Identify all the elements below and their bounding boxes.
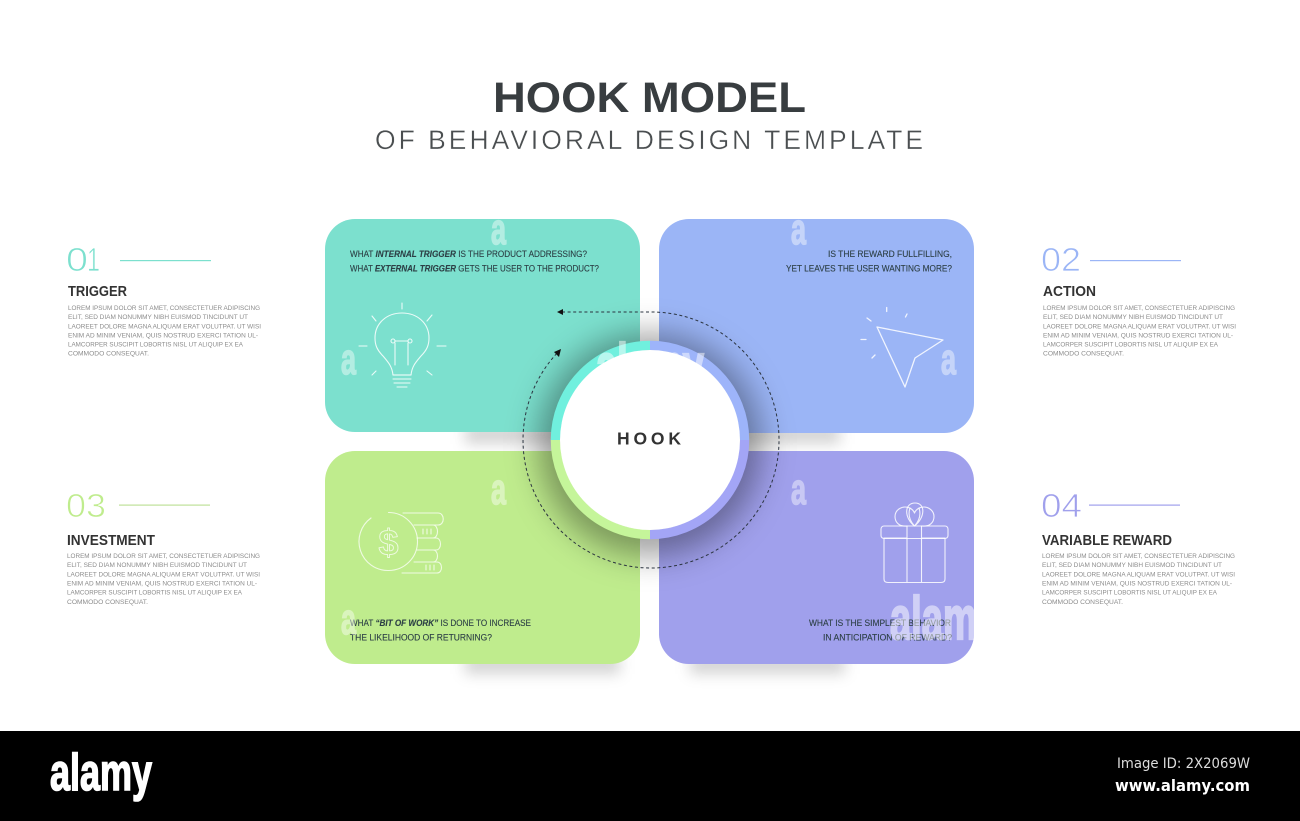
block: 02 action: LAOREET DOLORE MAGNA ALIQUAM ERAT VOLUTPAT. UT WISI — [1043, 324, 1236, 330]
hub shadow — [538, 333, 762, 557]
watermarks: a — [491, 465, 506, 514]
watermarks: a — [341, 595, 356, 644]
block: 01 trigger: ELIT, SED DIAM NONUMMY NIBH EUISMOD TINCIDUNT UT — [68, 314, 248, 321]
block: 03 investment: LOREM IPSUM DOLOR SIT AMET, CONSECTETUER ADIPISCING — [67, 553, 260, 560]
icon: gift — [881, 503, 948, 582]
block: 04 variable reward: ENIM AD MINIM VENIAM, QUIS NOSTRUD EXERCI TATION UL- — [1042, 580, 1232, 588]
block: 02 action: ACTION — [1043, 283, 1096, 300]
block: 03 investment: LAMCORPER SUSCIPIT LOBORTIS NISL UT ALIQUIP EX EA — [67, 590, 243, 596]
icon: coin stack: $ — [378, 522, 398, 563]
watermark: centre: alamy — [596, 332, 704, 399]
block: 04 variable reward: COMMODO CONSEQUAT. — [1042, 599, 1123, 606]
question: action: IS THE REWARD FULLFILLING, — [828, 249, 952, 259]
block: 01 trigger: 0 — [66, 241, 88, 278]
block: 02 action — [1041, 241, 1236, 358]
block: 04 variable reward: LOREM IPSUM DOLOR SIT AMET, CONSECTETUER ADIPISCING — [1042, 553, 1235, 560]
block: 04 variable reward: 04 — [1041, 487, 1082, 524]
watermarks: a — [341, 335, 356, 384]
icon: cursor — [861, 308, 943, 387]
watermarks: a — [491, 205, 506, 254]
cycle arrow — [523, 309, 779, 568]
block: 01 trigger: LAMCORPER SUSCIPIT LOBORTIS NISL UT ALIQUIP EX EA — [68, 342, 244, 348]
block: 02 action: LOREM IPSUM DOLOR SIT AMET, CONSECTETUER ADIPISCING — [1043, 305, 1235, 312]
block: 04 variable reward: VARIABLE REWARD — [1042, 532, 1172, 549]
watermarks — [341, 205, 998, 652]
watermarks: a — [791, 465, 806, 514]
block: 02 action: 02 — [1041, 241, 1081, 278]
watermarks: alamy — [890, 585, 998, 652]
title: HOOK MODEL — [493, 74, 806, 122]
icon: light bulb — [359, 303, 446, 387]
block: 03 investment — [66, 487, 260, 606]
block: 02 action: ELIT, SED DIAM NONUMMY NIBH EUISMOD TINCIDUNT UT — [1043, 314, 1223, 321]
block: 04 variable reward — [1041, 487, 1235, 606]
block: 01 trigger: TRIGGER — [68, 283, 127, 300]
watermarks: a — [791, 205, 806, 254]
block: 01 trigger — [66, 241, 261, 358]
question: variable reward — [809, 618, 952, 642]
title: OF BEHAVIORAL DESIGN TEMPLATE — [375, 125, 923, 155]
block: 01 trigger: LAOREET DOLORE MAGNA ALIQUAM ERAT VOLUTPAT. UT WISI — [68, 324, 261, 330]
panel: investment — [325, 451, 640, 664]
question: trigger — [350, 249, 599, 274]
question: action: YET LEAVES THE USER WANTING MORE? — [786, 264, 952, 274]
block: 02 action: COMMODO CONSEQUAT. — [1043, 350, 1124, 358]
title — [375, 74, 923, 155]
block: 02 action: LAMCORPER SUSCIPIT LOBORTIS NISL UT ALIQUIP EX EA — [1043, 342, 1219, 348]
block: 03 investment: LAOREET DOLORE MAGNA ALIQUAM ERAT VOLUTPAT. UT WISI — [67, 572, 260, 578]
block: 01 trigger: ENIM AD MINIM VENIAM, QUIS NOSTRUD EXERCI TATION UL- — [68, 332, 258, 340]
question: trigger: WHAT EXTERNAL TRIGGER GETS THE USER TO THE PRODUCT? — [350, 264, 599, 274]
icon: coin stack — [359, 512, 443, 573]
watermarks: a — [941, 335, 956, 384]
question: variable reward: IN ANTICIPATION OF REWARD? — [823, 632, 952, 642]
block: 01 trigger: COMMODO CONSEQUAT. — [68, 350, 149, 358]
question: investment: THE LIKELIHOOD OF RETURNING? — [350, 632, 492, 642]
footer bar: www.alamy.com — [1115, 776, 1250, 795]
block: 03 investment: ELIT, SED DIAM NONUMMY NIBH EUISMOD TINCIDUNT UT — [67, 562, 247, 569]
panel shadows — [465, 424, 845, 674]
footer bar: alamy — [50, 744, 152, 802]
question: investment: WHAT “BIT OF WORK” IS DONE TO INCREASE — [350, 618, 531, 628]
block: 03 investment: COMMODO CONSEQUAT. — [67, 599, 148, 606]
block: 04 variable reward: LAMCORPER SUSCIPIT LOBORTIS NISL UT ALIQUIP EX EA — [1042, 590, 1218, 596]
panel: variable reward — [659, 451, 974, 664]
hub ring — [556, 346, 744, 534]
question: investment — [350, 618, 531, 642]
panel: action — [659, 219, 974, 433]
block: 02 action: ENIM AD MINIM VENIAM, QUIS NOSTRUD EXERCI TATION UL- — [1043, 332, 1233, 340]
question: trigger: WHAT INTERNAL TRIGGER IS THE PRODUCT ADDRESSING? — [350, 249, 587, 259]
block: 04 variable reward: ELIT, SED DIAM NONUMMY NIBH EUISMOD TINCIDUNT UT — [1042, 562, 1222, 569]
panel: trigger — [325, 219, 640, 432]
hub label: HOOK — [617, 428, 681, 448]
block: 01 trigger: LOREM IPSUM DOLOR SIT AMET, CONSECTETUER ADIPISCING — [68, 305, 260, 312]
block: 03 investment: 03 — [66, 487, 106, 524]
hub centre — [560, 350, 740, 530]
block: 04 variable reward: LAOREET DOLORE MAGNA ALIQUAM ERAT VOLUTPAT. UT WISI — [1042, 572, 1235, 578]
question: action — [786, 249, 952, 274]
question: variable reward: WHAT IS THE SIMPLEST BEHAVIOR — [809, 618, 951, 628]
block: 03 investment: ENIM AD MINIM VENIAM, QUIS NOSTRUD EXERCI TATION UL- — [67, 580, 257, 588]
footer bar: Image ID: 2X2069W — [1117, 756, 1250, 772]
footer bar — [0, 731, 1300, 821]
block: 01 trigger: 1 — [87, 241, 100, 278]
block: 03 investment: INVESTMENT — [67, 532, 155, 549]
